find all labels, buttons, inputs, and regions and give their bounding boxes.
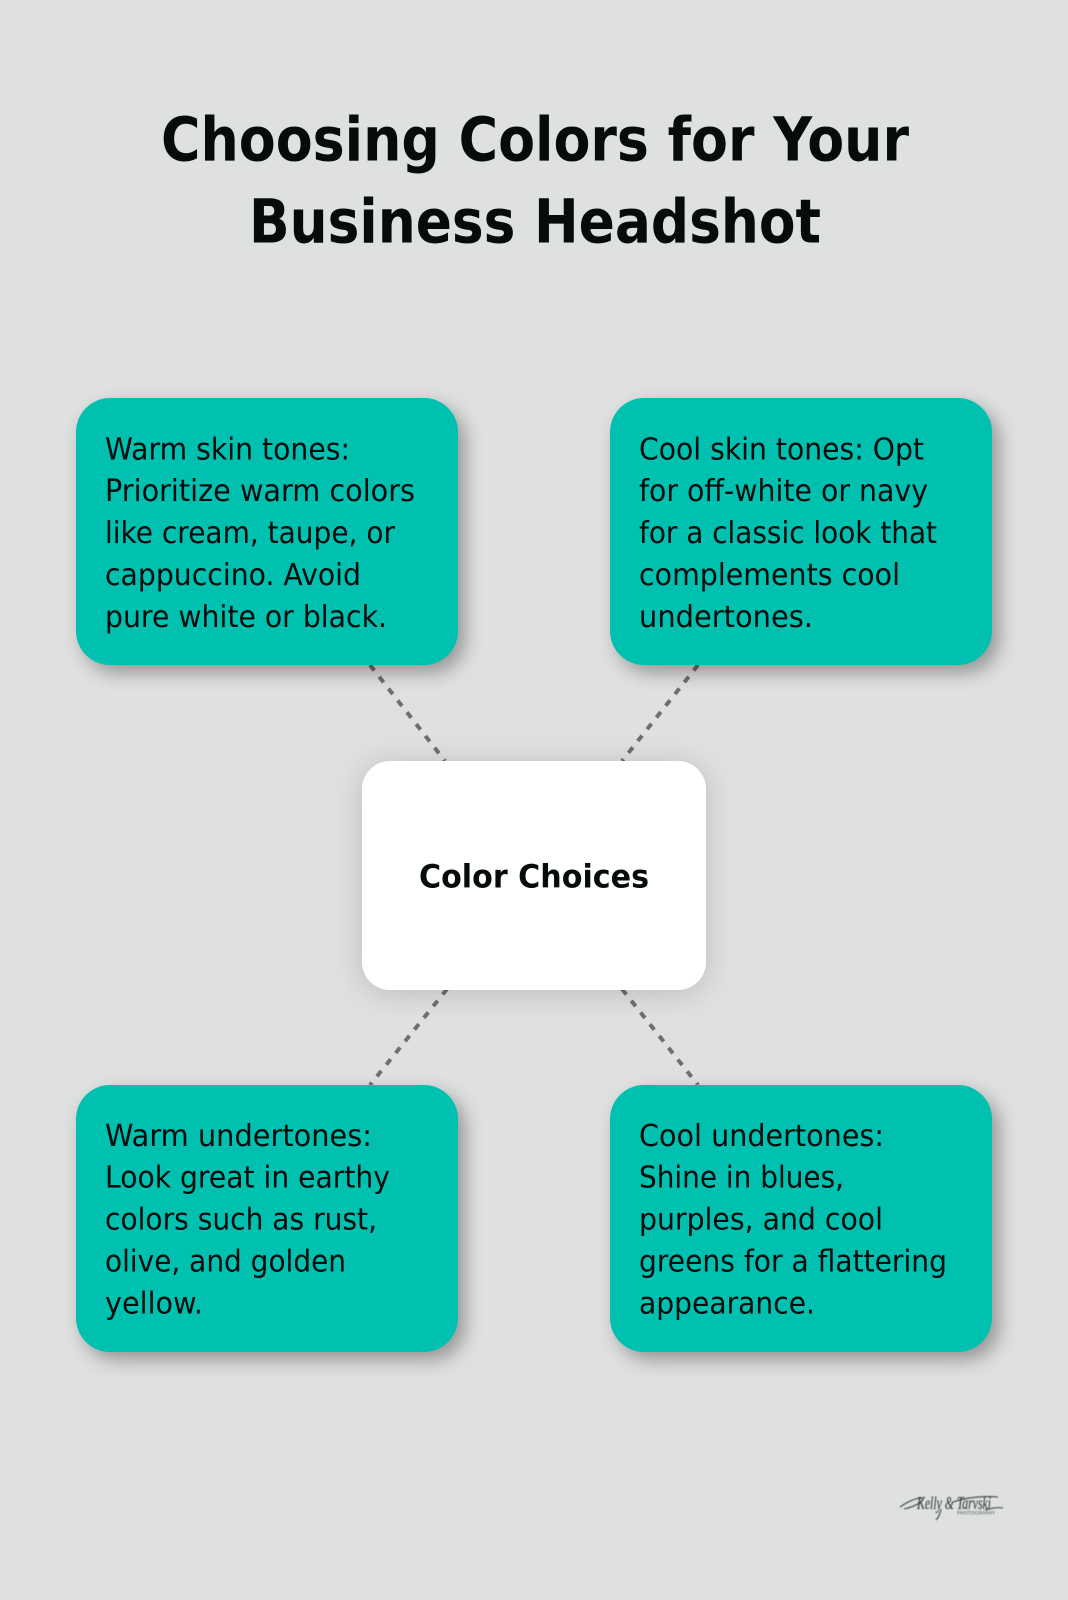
panel: warm skin tones: [76, 398, 458, 665]
connector: bottom left: [370, 989, 447, 1085]
title: Business Headshot: [249, 186, 821, 258]
panel: cool skin tones: Cool skin tones: Opt: [639, 432, 924, 468]
panel: warm skin tones: pure white or black.: [105, 600, 387, 635]
panel: warm undertones: yellow.: [105, 1286, 203, 1322]
panel: center node: Color Choices: [419, 858, 649, 896]
panel: warm skin tones: Prioritize warm colors: [105, 474, 415, 509]
logo: signature: Kelly & Tarvski: [916, 1493, 991, 1513]
panel: cool undertones: [610, 1085, 992, 1352]
panel: cool undertones: Shine in blues,: [639, 1160, 844, 1196]
panel: cool undertones: Cool undertones:: [639, 1119, 884, 1154]
logo: signature: PHOTOGRAPHY: [957, 1510, 996, 1516]
title: [161, 104, 909, 258]
panel: warm undertones: Warm undertones:: [105, 1119, 372, 1154]
panel: cool undertones: greens for a flattering: [639, 1244, 947, 1280]
panel: center node: [362, 761, 706, 990]
panel: cool skin tones: for a classic look that: [639, 516, 937, 551]
panel: warm undertones: colors such as rust,: [105, 1202, 377, 1238]
panel: warm skin tones: cappuccino. Avoid: [105, 558, 361, 593]
panel: cool undertones: purples, and cool: [639, 1202, 883, 1238]
connector: bottom right: [622, 989, 698, 1085]
panel: cool undertones: appearance.: [639, 1286, 815, 1322]
panel: warm undertones: [76, 1085, 458, 1352]
panel: warm undertones: Look great in earthy: [105, 1160, 390, 1196]
connector: top right: [622, 665, 698, 761]
title: Choosing Colors for Your: [161, 104, 909, 176]
panel: warm undertones: olive, and golden: [105, 1244, 346, 1280]
panel: warm skin tones: like cream, taupe, or: [105, 516, 396, 551]
panel: cool skin tones: complements cool: [639, 558, 900, 593]
panel: warm skin tones: Warm skin tones:: [105, 432, 350, 468]
panel: cool skin tones: [610, 398, 992, 665]
logo: signature: [900, 1493, 1003, 1520]
connector: top left: [370, 665, 445, 761]
panel: cool skin tones: for off-white or navy: [639, 474, 928, 509]
panel: cool skin tones: undertones.: [639, 600, 813, 635]
